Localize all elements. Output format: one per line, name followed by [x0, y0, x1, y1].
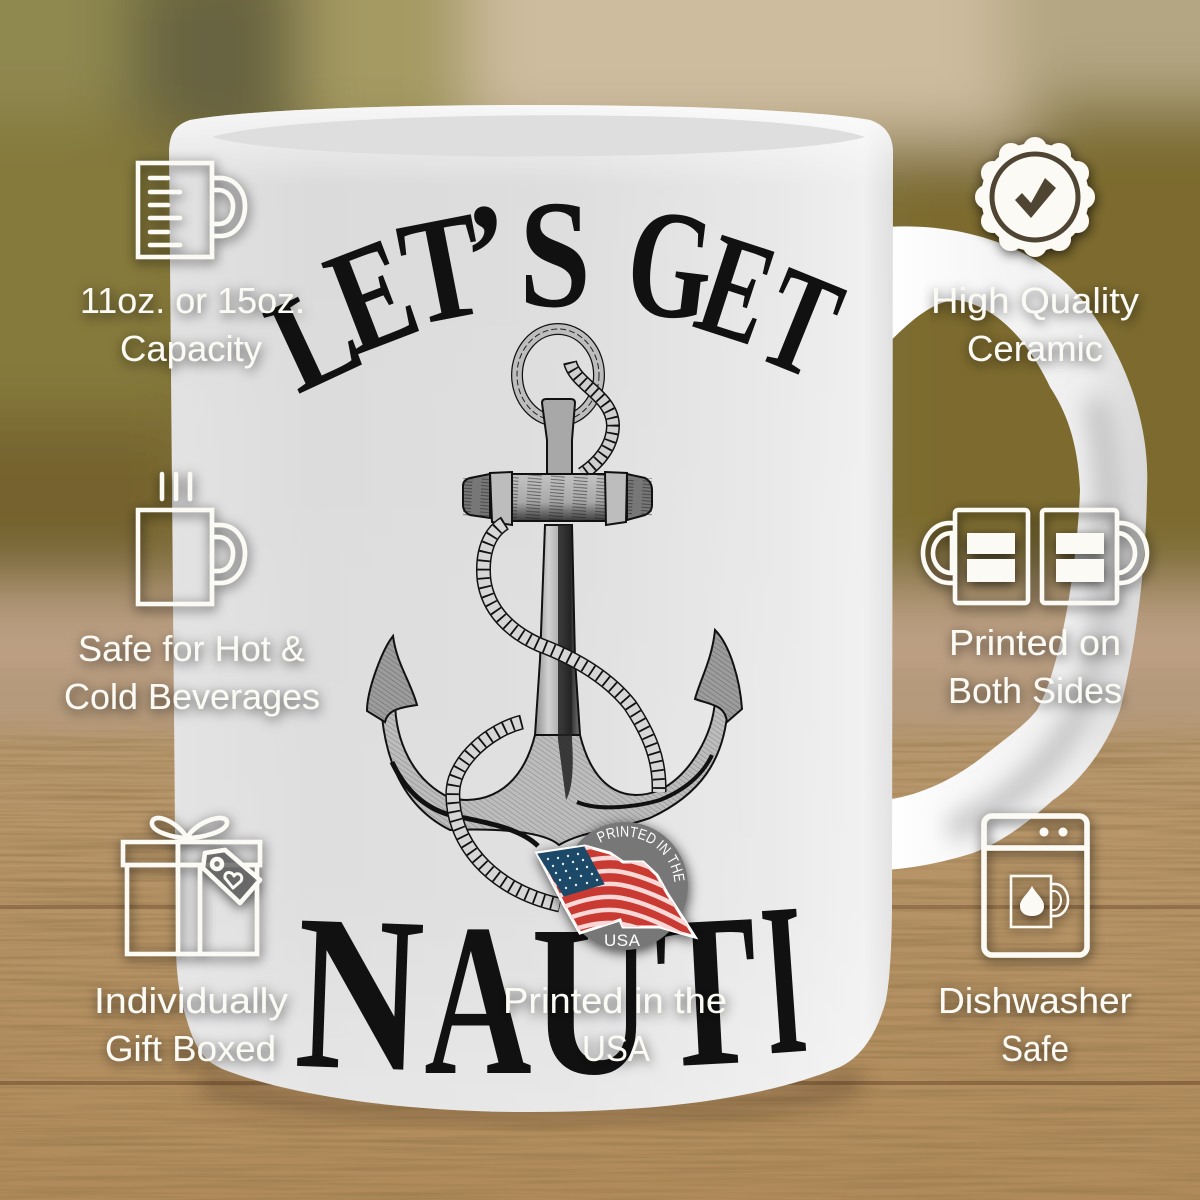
slogan bottom: NAUTI — [292, 858, 813, 1121]
label: capacity: Capacity — [120, 328, 262, 369]
label: both sides: Printed on — [949, 622, 1121, 663]
slogan top: LET'S GET — [247, 168, 861, 422]
label: printed in the USA: Printed in the — [503, 980, 727, 1021]
icon: gift box — [123, 818, 260, 954]
slogan bottom: NAUTI: I — [755, 858, 813, 1102]
rope upper — [570, 362, 613, 474]
badge text bottom: USA — [604, 931, 641, 950]
label: printed in the USA — [503, 980, 727, 1069]
label: dishwasher: Safe — [1001, 1028, 1069, 1069]
feature: gift boxed — [94, 818, 288, 1069]
right fluke — [695, 630, 742, 722]
label: hot and cold: Cold Beverages — [64, 676, 320, 717]
left fluke — [367, 636, 417, 722]
arm shadows — [392, 755, 712, 846]
mug shadow on table — [200, 1070, 860, 1120]
mug handle — [885, 226, 1147, 870]
label: gift boxed — [94, 980, 288, 1069]
slogan top: LET'S GET: T — [387, 180, 498, 358]
badge text top: PRINTED IN THE — [596, 826, 685, 882]
anchor stock — [463, 472, 652, 525]
feature: capacity — [80, 163, 305, 369]
slogan top: LET'S GET: E — [306, 203, 437, 386]
label: gift boxed: Gift Boxed — [105, 1028, 276, 1069]
icon: quality seal — [975, 137, 1095, 257]
slogan bottom: NAUTI: N — [292, 869, 427, 1119]
feature: printed both sides — [923, 510, 1147, 711]
label: dishwasher: Dishwasher — [938, 980, 1132, 1021]
anchor illustration — [367, 329, 742, 905]
rope middle — [483, 523, 659, 792]
feature: high quality — [931, 137, 1139, 369]
slogan top: LET'S GET: S — [519, 168, 591, 340]
slogan top: LET'S GET: L — [247, 253, 381, 422]
label: hot and cold: Safe for Hot & — [78, 628, 305, 669]
label: high quality: High Quality — [931, 280, 1139, 321]
printed in the USA badge — [530, 816, 698, 962]
rope lower — [453, 722, 560, 905]
label: capacity: 11oz. or 15oz. — [80, 280, 305, 321]
label: printed in the USA: USA — [582, 1028, 650, 1069]
label: capacity — [80, 280, 305, 369]
label: gift boxed: Individually — [94, 980, 288, 1021]
flag — [537, 845, 700, 958]
anchor shank top — [542, 399, 575, 475]
label: high quality: Ceramic — [967, 328, 1103, 369]
icon: steaming mug — [138, 474, 245, 604]
mug body — [169, 105, 893, 1112]
slogan top: LET'S GET: E — [680, 202, 794, 377]
label: both sides — [948, 622, 1122, 711]
slogan bottom: NAUTI: U — [531, 882, 653, 1120]
feature: hot and cold — [64, 474, 320, 717]
label: both sides: Both Sides — [948, 670, 1122, 711]
mug opening — [212, 115, 865, 157]
wooden table — [0, 670, 1200, 1200]
slogan bottom: NAUTI: T — [651, 868, 764, 1114]
label: high quality — [931, 280, 1139, 369]
slogan top: LET'S GET: ’ — [461, 173, 512, 340]
icon: measuring mug — [138, 163, 245, 257]
label: hot and cold — [64, 628, 320, 717]
icon: two mugs — [923, 510, 1147, 603]
icon: dishwasher — [984, 816, 1087, 955]
slogan top: LET'S GET: T — [739, 235, 861, 411]
label: dishwasher — [938, 980, 1132, 1069]
anchor ring — [517, 329, 599, 421]
slogan top: LET'S GET: G — [618, 174, 722, 354]
anchor arms and shank — [381, 525, 728, 845]
slogan bottom: NAUTI: A — [424, 880, 532, 1121]
feature: dishwasher safe — [938, 816, 1132, 1069]
